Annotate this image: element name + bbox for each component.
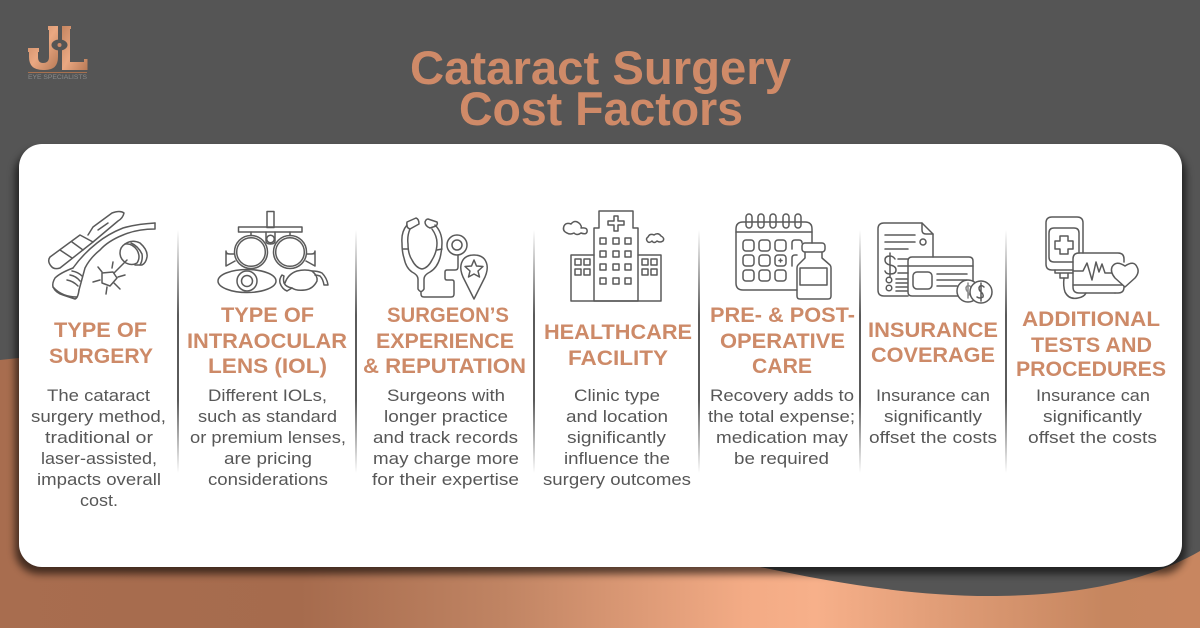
panel: additional tests and procedures xyxy=(1016,217,1166,447)
description: Recovery adds to xyxy=(710,387,854,405)
heading xyxy=(49,318,153,368)
icon: stethoscope and location pin xyxy=(402,218,487,299)
title: Cost Factors xyxy=(459,82,743,135)
column dividers xyxy=(177,230,1007,473)
heading: INSURANCE xyxy=(868,318,998,342)
description: and location xyxy=(566,408,668,426)
heading xyxy=(187,303,347,378)
title: Cataract Surgery xyxy=(410,41,791,94)
heading: INTRAOCULAR xyxy=(187,329,347,353)
description: significantly xyxy=(1043,408,1143,426)
description: traditional or xyxy=(45,429,154,447)
heading: FACILITY xyxy=(568,346,668,370)
heading: CARE xyxy=(752,354,812,378)
description: offset the costs xyxy=(869,429,997,447)
description: The cataract xyxy=(47,387,150,405)
description: be required xyxy=(734,450,829,468)
heading: SURGEON’S xyxy=(387,303,509,327)
description: significantly xyxy=(567,429,667,447)
heading: HEALTHCARE xyxy=(544,320,692,344)
description: Different IOLs, xyxy=(208,387,327,405)
description: considerations xyxy=(208,471,328,489)
description xyxy=(31,387,166,510)
heading: PRE- & POST- xyxy=(710,303,855,327)
heading xyxy=(544,320,692,370)
heading xyxy=(363,303,526,378)
description: the total expense; xyxy=(708,408,855,426)
heading xyxy=(710,303,855,378)
icon: bill, card and coins xyxy=(878,223,992,303)
description: Clinic type xyxy=(574,387,660,405)
description xyxy=(1028,387,1157,447)
description: impacts overall xyxy=(37,471,161,489)
icon: hospital xyxy=(563,211,664,301)
description: offset the costs xyxy=(1028,429,1157,447)
heading: PROCEDURES xyxy=(1016,357,1166,381)
logo: EYE SPECIALISTS xyxy=(28,74,88,81)
description: significantly xyxy=(884,408,983,426)
description: influence the xyxy=(564,450,670,468)
description: laser-assisted, xyxy=(41,450,157,468)
description: such as standard xyxy=(198,408,337,426)
icon: trial frame, eye and lens xyxy=(218,212,328,292)
panel: pre- and post-operative care xyxy=(708,214,855,468)
panel: insurance coverage xyxy=(868,223,998,447)
heading xyxy=(868,318,998,367)
heading xyxy=(1016,307,1166,381)
description: medication may xyxy=(716,429,849,447)
heading: LENS (IOL) xyxy=(208,354,327,378)
heading: TYPE OF xyxy=(54,318,147,342)
description: and track records xyxy=(373,429,518,447)
white card xyxy=(19,144,1182,567)
heading: ADDITIONAL xyxy=(1022,307,1160,331)
background wave xyxy=(0,350,1200,628)
heading: TYPE OF xyxy=(221,303,314,327)
description: surgery outcomes xyxy=(543,471,691,489)
description: cost. xyxy=(80,492,118,510)
description: surgery method, xyxy=(31,408,166,426)
heading: SURGERY xyxy=(49,344,153,368)
description xyxy=(708,387,855,468)
heading: COVERAGE xyxy=(871,343,995,367)
description xyxy=(190,387,346,489)
icon: IV bag and heart monitor xyxy=(1046,217,1138,298)
icon: scalpel and ultrasound probe xyxy=(49,212,155,299)
description: are pricing xyxy=(224,450,312,468)
heading: TESTS AND xyxy=(1031,333,1152,357)
description xyxy=(543,387,691,489)
logo xyxy=(28,26,88,81)
panel: healthcare facility xyxy=(543,211,692,489)
description: Insurance can xyxy=(876,387,990,405)
description: for their expertise xyxy=(372,471,519,489)
description: Insurance can xyxy=(1036,387,1150,405)
panel: surgeon's experience xyxy=(363,218,526,489)
description: may charge more xyxy=(373,450,519,468)
description: longer practice xyxy=(384,408,508,426)
description: Surgeons with xyxy=(387,387,505,405)
heading: OPERATIVE xyxy=(720,329,845,353)
panel: type of intraocular lens xyxy=(187,212,347,489)
heading: & REPUTATION xyxy=(363,354,526,378)
description xyxy=(869,387,997,447)
description xyxy=(372,387,519,489)
card shadow xyxy=(15,150,1186,574)
description: or premium lenses, xyxy=(190,429,346,447)
title xyxy=(410,41,791,135)
heading: EXPERIENCE xyxy=(376,329,514,353)
panel: type of surgery xyxy=(31,212,166,510)
icon: calendar and medicine bottle xyxy=(736,214,831,299)
